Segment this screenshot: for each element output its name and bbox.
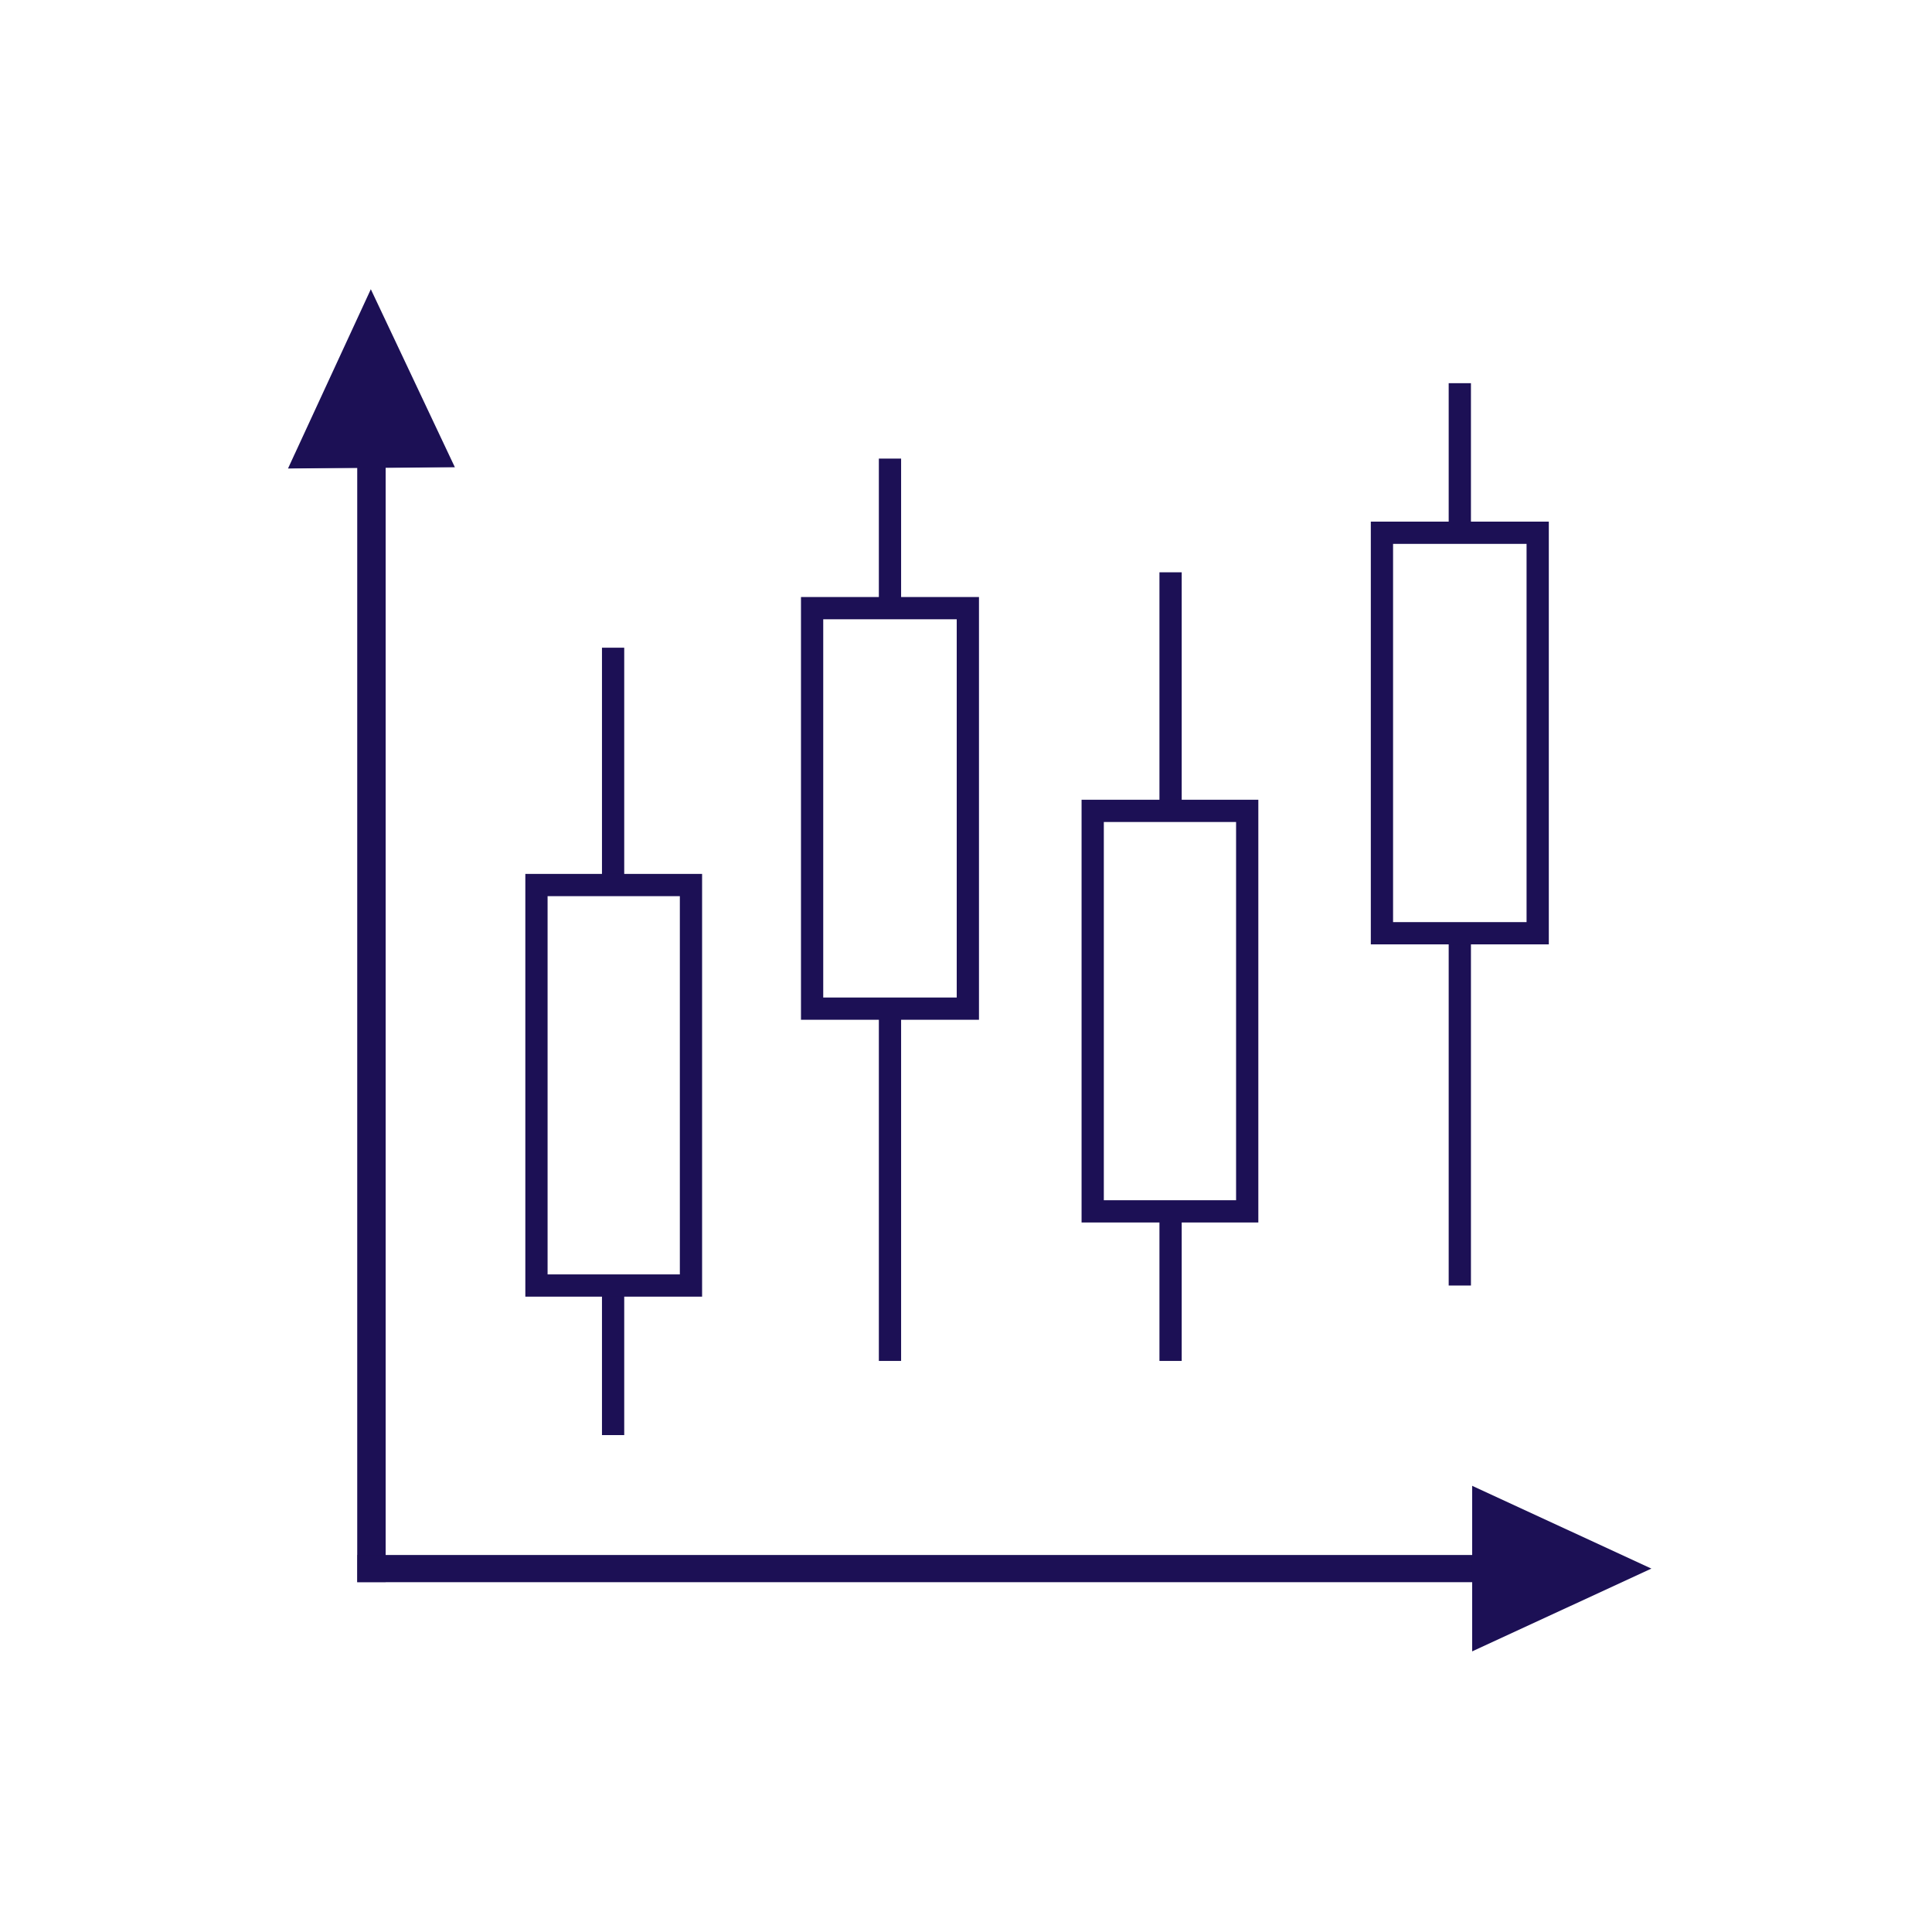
y axis with arrow (288, 289, 455, 1582)
candle 3 (1093, 573, 1247, 1361)
x axis with arrow (357, 1486, 1651, 1651)
candle 4 (1382, 383, 1538, 1285)
candle 2 (812, 458, 968, 1361)
candle 1 (536, 648, 691, 1435)
